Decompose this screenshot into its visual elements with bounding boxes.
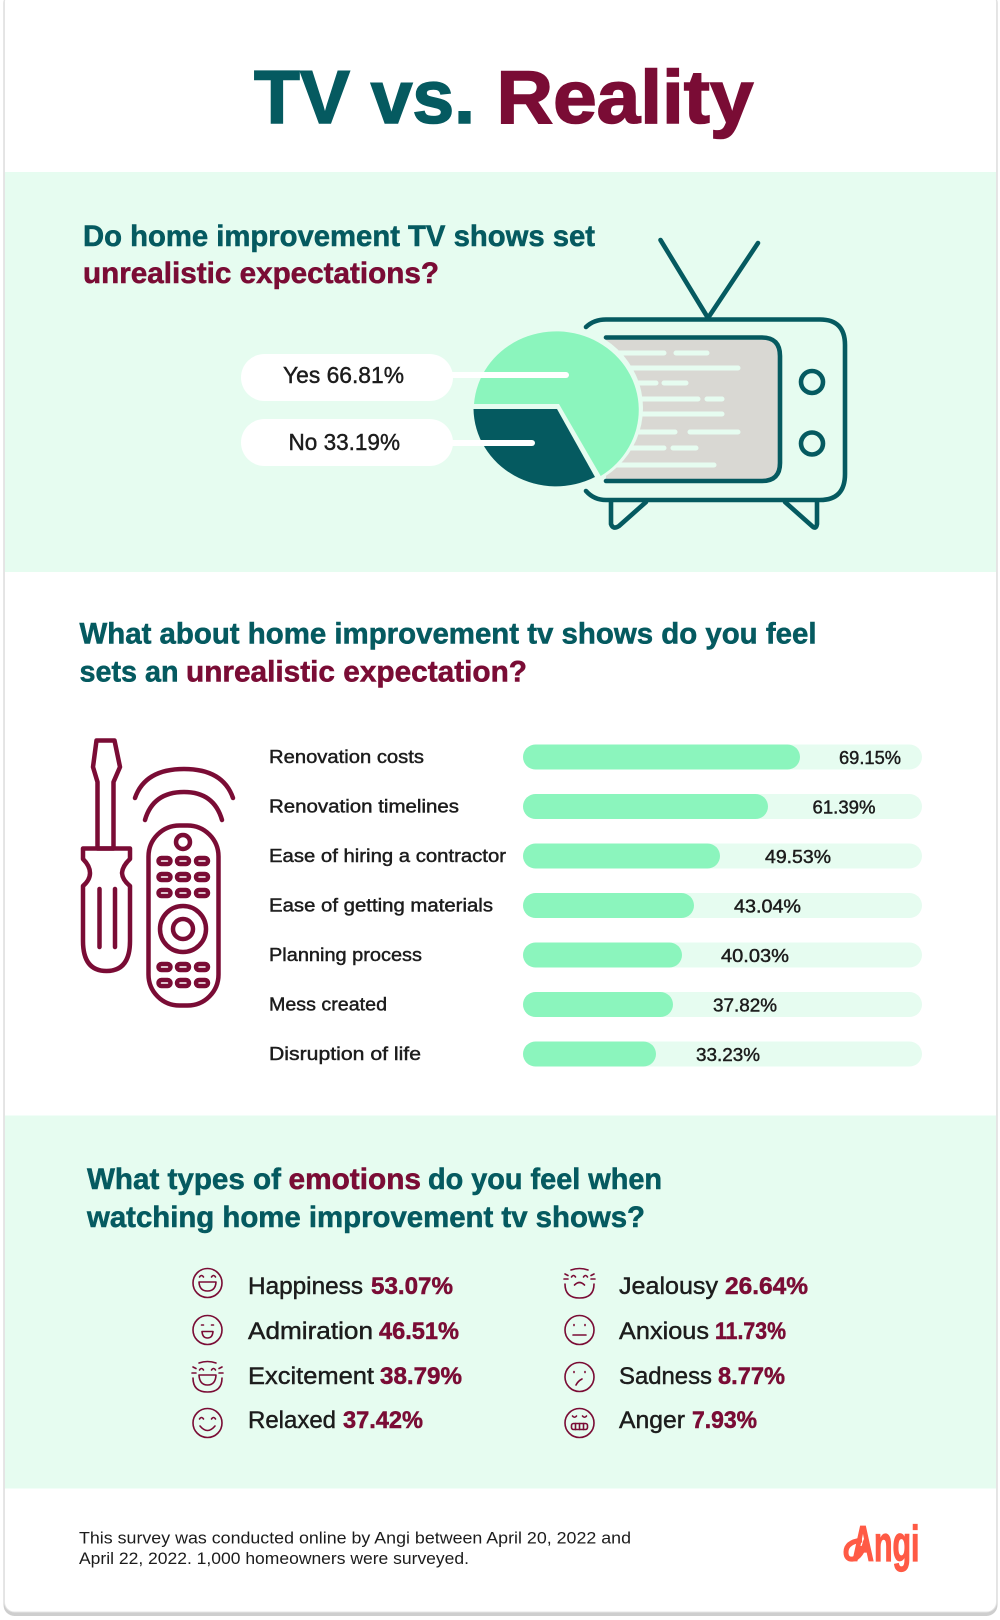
icon: jealousy — [564, 1268, 595, 1298]
text: anxious: Anxious — [619, 1318, 709, 1345]
bar: planning process: Planning process — [269, 944, 422, 965]
pie slice: yes — [474, 331, 639, 476]
text: sadness: 8.77% — [718, 1363, 785, 1390]
text: relaxed: Relaxed — [248, 1407, 336, 1434]
text: excitement: Excitement — [248, 1363, 374, 1390]
footnote — [79, 1528, 631, 1568]
heading: emotions: What types of — [87, 1163, 281, 1196]
bar: disruption of life — [269, 1042, 922, 1066]
pie chart — [469, 325, 643, 491]
icon: television — [586, 240, 845, 528]
text: admiration: Admiration — [248, 1318, 373, 1345]
heading: emotions: emotions — [288, 1163, 421, 1196]
text: relaxed: 37.42% — [343, 1407, 423, 1434]
bar: renovation timelines — [269, 794, 922, 819]
bar: planning process — [269, 942, 922, 968]
bar chart — [269, 744, 922, 1066]
text: happiness: Happiness — [248, 1273, 363, 1300]
footnote: April 22, 2022. 1,000 homeowners were surveyed. — [79, 1549, 469, 1568]
label: no: No 33.19% — [288, 429, 400, 455]
logo: Angi: Angi — [852, 1516, 920, 1572]
text: sadness — [619, 1363, 785, 1390]
heading: unrealistic expectations — [83, 220, 595, 290]
text: excitement: 38.79% — [380, 1363, 462, 1390]
heading: emotions: watching home improvement tv shows? — [86, 1201, 645, 1234]
text: relaxed — [248, 1407, 423, 1434]
heading: unrealistic expectations: unrealistic expectations? — [83, 257, 439, 290]
logo: Angi — [846, 1516, 920, 1572]
label: yes — [241, 354, 566, 401]
heading: what sets unrealistic expectation: What about home improvement tv shows do you feel — [80, 618, 816, 650]
bar: ease of getting materials: Ease of getting materials — [269, 894, 493, 916]
icon: excitement — [192, 1362, 223, 1392]
bar: renovation timelines: 61.39% — [812, 796, 876, 818]
footnote: This survey was conducted online by Angi between April 20, 2022 and — [79, 1528, 631, 1548]
heading: what sets unrealistic expectation — [80, 618, 816, 688]
title — [254, 55, 754, 139]
text: anxious: 11.73% — [715, 1318, 786, 1345]
label: yes: Yes 66.81% — [283, 362, 404, 388]
icon: remote control — [135, 769, 233, 1006]
label: no — [241, 419, 532, 466]
heading: emotions — [86, 1163, 662, 1234]
icon: relaxed — [193, 1408, 222, 1438]
bar: ease of hiring a contractor — [269, 844, 922, 868]
text: anger: Anger — [619, 1407, 685, 1434]
text: happiness: 53.07% — [371, 1273, 453, 1300]
text: excitement — [248, 1363, 462, 1390]
text: jealousy: Jealousy — [619, 1273, 718, 1300]
bar: renovation costs: Renovation costs — [269, 746, 424, 767]
icon: anxious — [565, 1316, 594, 1344]
pie slice: no — [474, 409, 595, 486]
bar: renovation costs — [269, 744, 922, 770]
panel: emotions — [5, 1116, 996, 1488]
text: sadness: Sadness — [619, 1363, 712, 1390]
icon: happiness — [193, 1268, 222, 1298]
bar: disruption of life: 33.23% — [696, 1044, 760, 1065]
text: jealousy: 26.64% — [725, 1273, 808, 1300]
bar: planning process: 40.03% — [721, 945, 789, 966]
heading: what sets unrealistic expectation: sets an — [80, 656, 178, 688]
bar: mess created — [269, 992, 922, 1017]
bar: ease of hiring a contractor: 49.53% — [765, 846, 831, 867]
title: Reality — [496, 55, 754, 139]
heading: what sets unrealistic expectation: unrealistic expectation? — [186, 656, 527, 688]
bar: mess created: 37.82% — [713, 994, 777, 1016]
bar: ease of getting materials — [269, 893, 922, 918]
text: anger — [619, 1407, 757, 1434]
bar: renovation timelines: Renovation timelines — [269, 796, 459, 816]
title: TV vs. — [254, 55, 475, 139]
heading: emotions: do you feel when — [428, 1163, 662, 1196]
text: anxious — [619, 1318, 786, 1345]
bar: mess created: Mess created — [269, 994, 387, 1014]
bar: disruption of life: Disruption of life — [269, 1043, 421, 1064]
bar: ease of getting materials: 43.04% — [734, 896, 801, 916]
icon: screwdriver — [83, 740, 130, 971]
panel: unrealistic expectations — [5, 172, 996, 572]
icon: sadness — [565, 1362, 594, 1392]
bar: ease of hiring a contractor: Ease of hiring a contractor — [269, 845, 506, 866]
bar: renovation costs: 69.15% — [839, 747, 901, 768]
heading: unrealistic expectations: Do home improvement TV shows set — [83, 220, 595, 253]
text: admiration — [248, 1318, 459, 1345]
text: happiness — [248, 1273, 453, 1300]
text: anger: 7.93% — [692, 1407, 757, 1434]
icon: admiration — [193, 1316, 222, 1344]
text: jealousy — [619, 1273, 808, 1300]
icon: anger — [565, 1408, 594, 1438]
text: admiration: 46.51% — [379, 1318, 459, 1345]
